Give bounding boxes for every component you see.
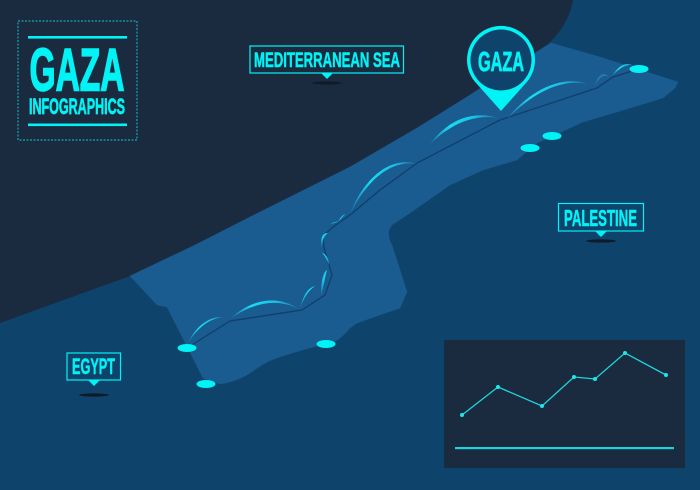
label: Palestine: PALESTINE — [564, 205, 637, 231]
label: Egypt — [67, 353, 120, 397]
title block — [18, 21, 137, 140]
map: Gaza strip — [130, 43, 678, 384]
label: Palestine — [558, 204, 644, 243]
chart line — [462, 353, 666, 415]
chart baseline — [455, 447, 674, 449]
line chart panel — [444, 340, 685, 468]
map pin: Gaza: GAZA — [478, 46, 524, 77]
route arcs — [188, 64, 634, 343]
location marker dots — [178, 65, 648, 388]
sea: Mediterranean — [0, 0, 573, 323]
subtitle: INFOGRAPHICS: INFOGRAPHICS — [29, 94, 125, 119]
route line — [187, 69, 638, 348]
title: GAZA: GAZA — [30, 36, 124, 104]
label: Mediterranean Sea — [250, 46, 404, 85]
map pin: Gaza — [467, 26, 535, 111]
chart points — [460, 351, 668, 417]
label: Egypt: EGYPT — [72, 354, 115, 379]
label: Mediterranean Sea: MEDITERRANEAN SEA — [254, 49, 400, 72]
